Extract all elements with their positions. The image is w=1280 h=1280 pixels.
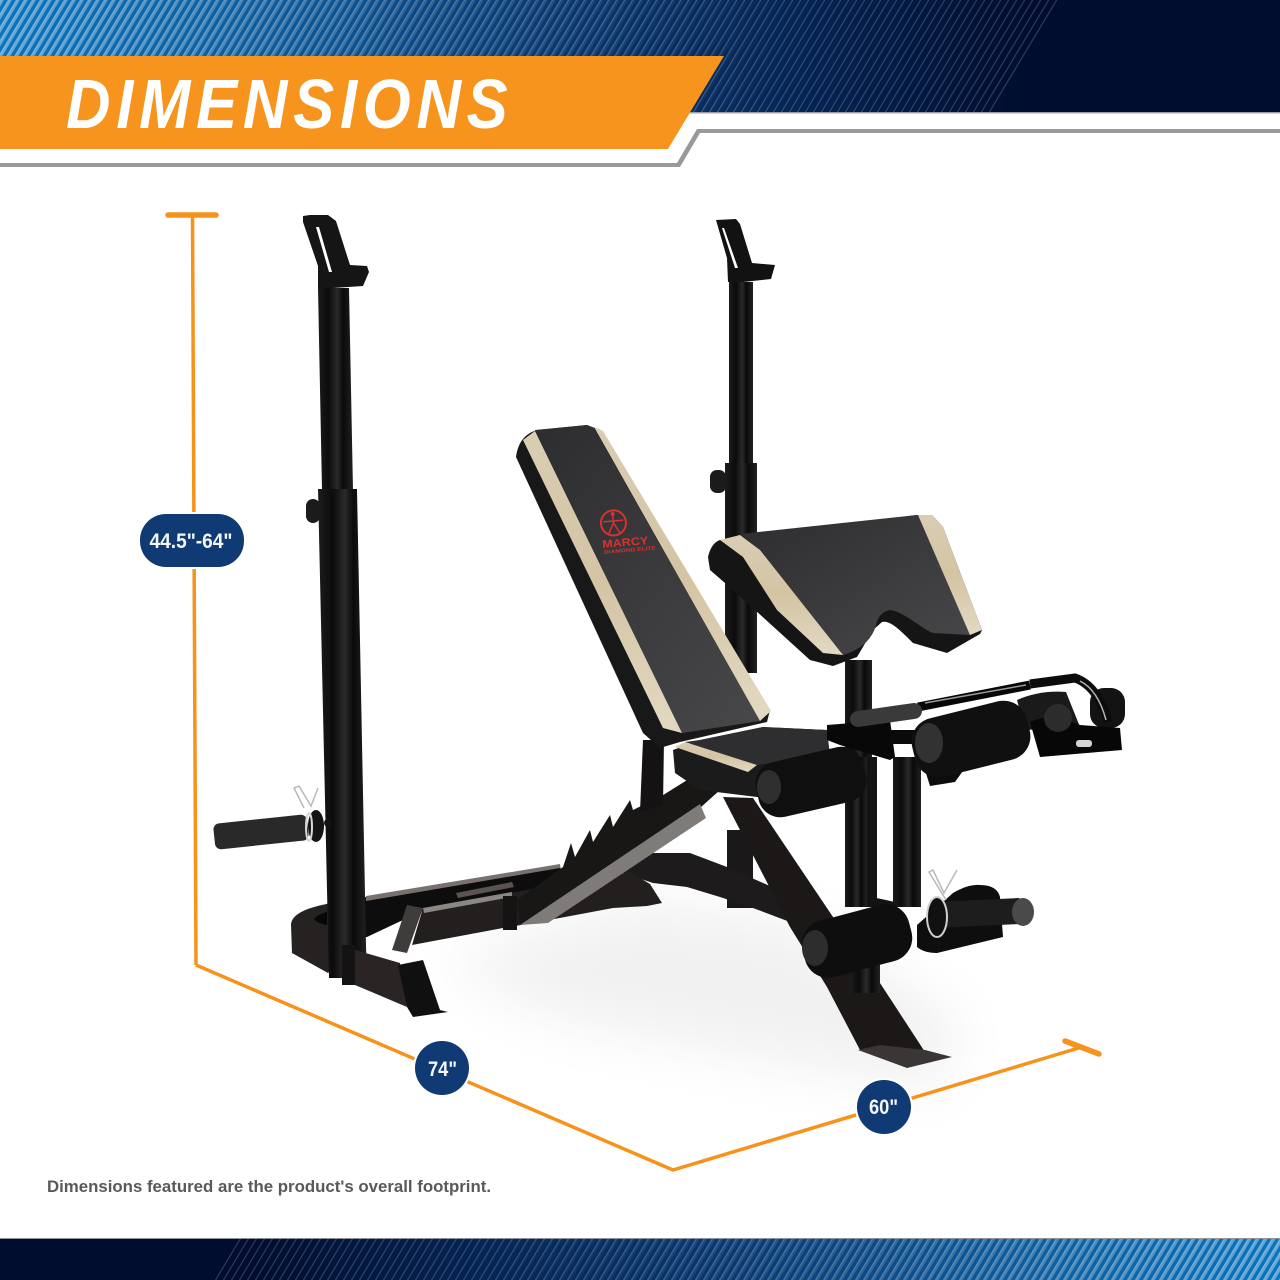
weight bench illustration [213,215,1125,1068]
rear base arc [623,853,790,922]
left base rail [320,864,563,940]
upper right roller [906,696,1036,786]
seat pad [673,727,830,797]
footer band [0,1238,1280,1280]
header gray rule [0,129,1280,167]
left upright [303,215,369,978]
heading: DIMENSIONS [66,64,508,143]
ratchet support arm [517,740,720,925]
width label: 74" [428,1058,457,1081]
front left foot [342,945,448,1017]
lower back roller [917,885,1003,953]
lower right peg [927,870,1034,937]
seat roller [751,742,871,822]
center rail with feet [392,872,662,953]
depth label [857,1080,911,1134]
height label: 44.5"-64" [150,530,232,553]
width label [415,1041,469,1095]
rear upright [710,219,775,908]
floor shadow [440,900,960,1090]
height label [140,514,244,567]
title banner [0,56,724,149]
marcy logo [599,507,657,556]
curved base end [291,904,340,973]
left weight peg [213,786,332,850]
marcy logo: DIAMOND ELITE [604,545,657,556]
dimension lines [168,215,1099,1170]
back pad [516,425,771,748]
depth label: 60" [869,1096,898,1119]
main diagonal strut [723,797,925,1060]
marcy logo: MARCY [602,535,649,551]
front foot plate [858,1045,952,1068]
footnote: Dimensions featured are the product's overall footprint. [47,1177,491,1196]
leg developer arm [827,678,1125,760]
bench vertical tubes [845,660,921,993]
preacher curl pad [708,515,982,666]
header band [0,0,1280,114]
lower front roller [796,899,918,983]
